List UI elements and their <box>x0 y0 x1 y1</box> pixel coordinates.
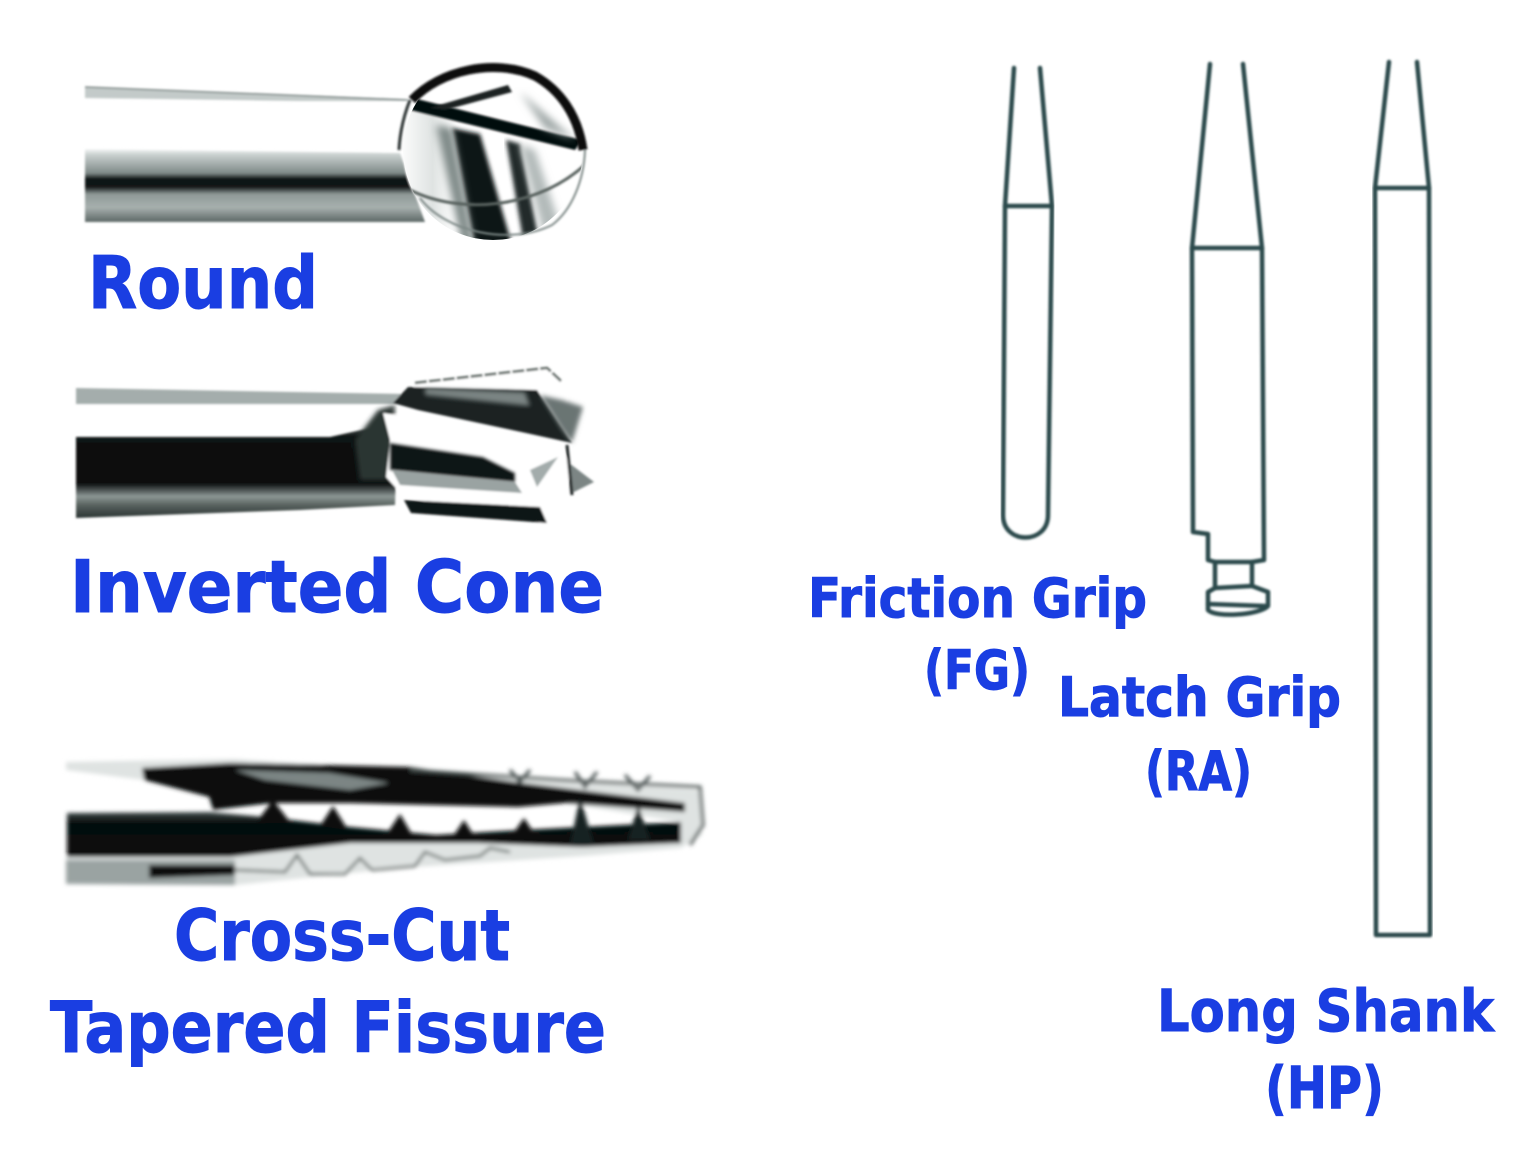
bur: cross-cut tapered fissure <box>66 759 703 885</box>
shank: friction grip <box>1003 68 1052 538</box>
label: HP: (HP) <box>1265 1054 1384 1122</box>
label: Long Shank: Long Shank <box>1157 977 1495 1045</box>
label: Friction Grip: Friction Grip <box>808 567 1147 630</box>
label: Latch Grip: Latch Grip <box>1058 666 1341 729</box>
bur: round <box>85 60 590 245</box>
bur: inverted cone <box>76 368 594 525</box>
label: Tapered Fissure: Tapered Fissure <box>50 987 606 1069</box>
shank: long shank <box>1375 62 1430 935</box>
label: FG: (FG) <box>924 639 1030 702</box>
label: Inverted Cone: Inverted Cone <box>70 545 604 629</box>
label: Cross-Cut: Cross-Cut <box>174 895 510 977</box>
label: RA: (RA) <box>1145 740 1252 803</box>
label: Round: Round <box>88 241 318 325</box>
shank: latch grip <box>1192 64 1268 615</box>
